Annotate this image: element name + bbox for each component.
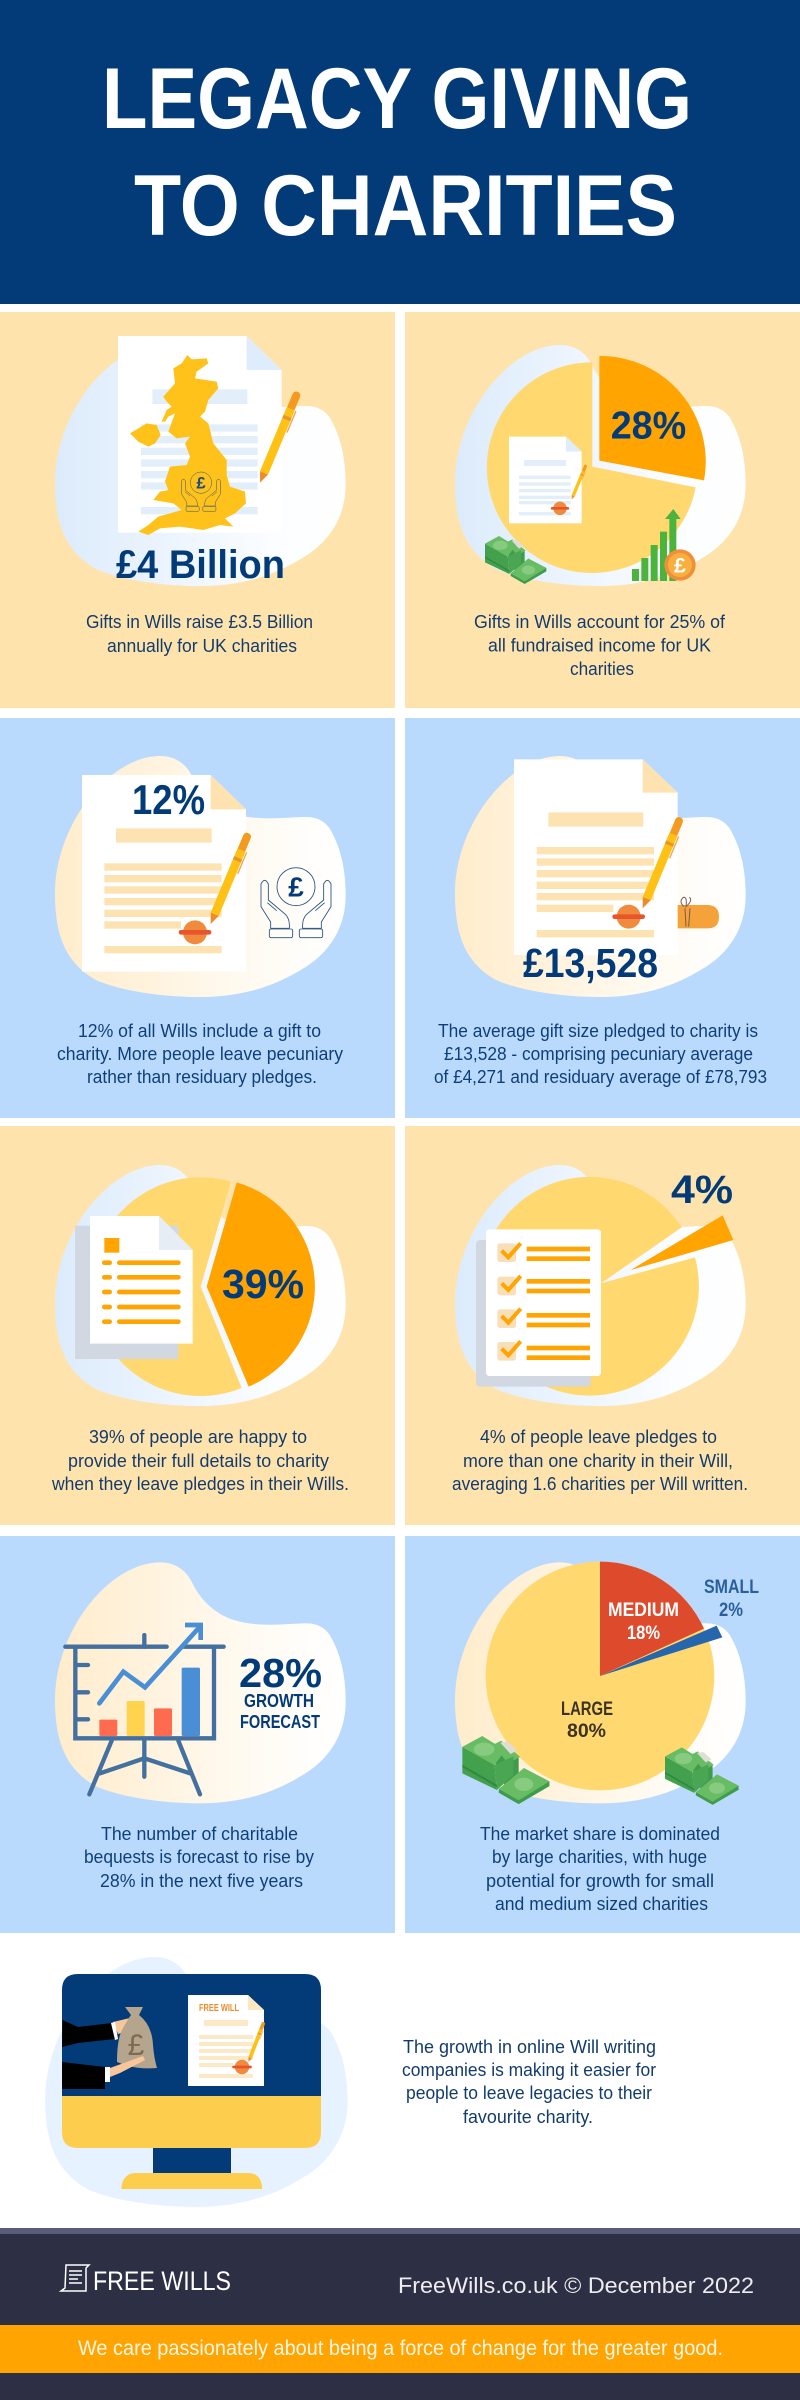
title: LEGACY GIVING xyxy=(102,51,692,147)
pie labels: 80% xyxy=(567,1721,606,1742)
caption 3: 12% of all Wills include a gift to xyxy=(78,1020,321,1041)
illustration: will document and scroll xyxy=(514,759,719,955)
blob 9 xyxy=(45,1957,348,2207)
panel: 28 percent of income xyxy=(405,312,800,708)
panel: growth forecast xyxy=(0,1536,395,1933)
caption 7 xyxy=(84,1823,315,1891)
caption 5: 39% of people are happy to xyxy=(89,1426,307,1447)
text: online will writing xyxy=(402,2036,656,2127)
text: online will writing: people to leave legacies to their xyxy=(406,2082,652,2103)
caption 2 xyxy=(474,611,726,679)
caption 5 xyxy=(51,1426,349,1494)
caption 5: provide their full details to charity xyxy=(68,1450,330,1471)
pie labels: MEDIUM xyxy=(608,1600,679,1621)
panel 7 background xyxy=(0,1536,395,1933)
panel 6 background xyxy=(405,1126,800,1525)
illustration: will document and hands xyxy=(82,775,331,972)
caption 2: charities xyxy=(570,658,634,679)
blob 8 xyxy=(455,1562,746,1803)
caption 3: charity. More people leave pecuniary xyxy=(57,1043,344,1064)
illustration: will with UK map xyxy=(118,336,303,535)
caption 3 xyxy=(57,1020,344,1087)
footer xyxy=(0,2228,800,2400)
caption 4: The average gift size pledged to charity is xyxy=(438,1020,758,1041)
caption 1: Gifts in Wills raise £3.5 Billion xyxy=(86,611,313,632)
pie labels: 2% xyxy=(719,1600,743,1621)
caption 8: potential for growth for small xyxy=(486,1870,714,1891)
caption 2: all fundraised income for UK xyxy=(488,634,712,656)
big number: 39 percent: 39% xyxy=(222,1261,304,1307)
caption 6: 4% of people leave pledges to xyxy=(480,1426,717,1447)
panel: average gift size xyxy=(405,718,800,1118)
big number: 28 percent growth forecast: GROWTH xyxy=(244,1691,314,1711)
caption 4: of £4,271 and residuary average of £78,793 xyxy=(434,1066,767,1087)
caption 8: by large charities, with huge xyxy=(492,1846,707,1867)
panel 5 background xyxy=(0,1126,395,1525)
footer background xyxy=(0,2228,800,2400)
panel 3 background xyxy=(0,718,395,1118)
pie chart 4 percent with checklist xyxy=(476,1177,733,1396)
title: TO CHARITIES xyxy=(134,158,677,254)
will document on screen xyxy=(188,1995,266,2086)
panel 1 background xyxy=(0,312,395,708)
caption 4 xyxy=(434,1020,767,1087)
text: online will writing: favourite charity. xyxy=(463,2106,593,2127)
pie labels: LARGE xyxy=(561,1699,613,1720)
caption 1: annually for UK charities xyxy=(107,635,297,656)
header background xyxy=(0,0,800,304)
caption 7: The number of charitable xyxy=(101,1823,298,1844)
caption 3: rather than residuary pledges. xyxy=(87,1066,317,1087)
pie chart 28 percent xyxy=(485,356,706,584)
big number: 4 percent: 4% xyxy=(671,1168,733,1212)
text: online will writing: The growth in online Will writing xyxy=(403,2036,656,2057)
caption 8: The market share is dominated xyxy=(480,1823,720,1844)
text: online will writing: companies is making it easier for xyxy=(402,2059,656,2080)
big number: 28 percent growth forecast: FORECAST xyxy=(240,1712,320,1732)
panel: 12 percent xyxy=(0,718,395,1118)
caption 6: more than one charity in their Will, xyxy=(463,1450,733,1471)
caption 7: 28% in the next five years xyxy=(100,1870,303,1891)
pie labels xyxy=(561,1577,759,1742)
blob 6 xyxy=(455,1165,746,1406)
big number: 28 percent growth forecast xyxy=(239,1650,322,1732)
caption 4: £13,528 - comprising pecuniary average xyxy=(444,1043,753,1064)
will document on screen: FREE WILL xyxy=(199,2003,239,2014)
caption 8 xyxy=(480,1823,720,1914)
blob 1 xyxy=(55,345,346,586)
title xyxy=(102,51,692,254)
pie chart 28 percent: £ xyxy=(674,554,686,578)
caption 5: when they leave pledges in their Wills. xyxy=(51,1473,349,1494)
banner text: We care passionately about being a force of change for the greater good. xyxy=(78,2337,723,2360)
big number: 13,528: £13,528 xyxy=(523,940,658,986)
big number: 28 percent growth forecast: 28% xyxy=(239,1650,322,1696)
blob 3 xyxy=(55,756,346,997)
caption 8: and medium sized charities xyxy=(495,1893,708,1914)
panel 2 background xyxy=(405,312,800,708)
blob 5 xyxy=(55,1165,346,1406)
panel: 4 percent xyxy=(405,1126,800,1525)
logo: free wills: FREE WILLS xyxy=(93,2266,231,2296)
pie chart 39 percent with document xyxy=(75,1177,315,1396)
caption 6: averaging 1.6 charities per Will written. xyxy=(452,1473,748,1494)
panel: 39 percent xyxy=(0,1126,395,1525)
panel: market share xyxy=(405,1536,800,1933)
website and date: FreeWills.co.uk © December 2022 xyxy=(398,2273,754,2298)
logo: free wills xyxy=(61,2265,231,2296)
caption 7: bequests is forecast to rise by xyxy=(84,1846,315,1867)
blob 7 xyxy=(55,1562,346,1803)
caption 1 xyxy=(86,611,313,656)
caption 2: Gifts in Wills account for 25% of xyxy=(474,611,726,632)
big number: 4 billion: £4 Billion xyxy=(116,543,285,587)
icon: hands holding money bag xyxy=(62,2007,157,2089)
big number: 28 percent: 28% xyxy=(611,404,686,448)
chart: presentation easel xyxy=(65,1625,224,1794)
orange banner xyxy=(0,2325,800,2373)
panel 4 background xyxy=(405,718,800,1118)
pie labels: 18% xyxy=(627,1623,660,1644)
panel: online will writing xyxy=(45,1957,656,2207)
illustration: computer monitor xyxy=(62,1974,321,2189)
pie chart: market share xyxy=(462,1562,739,1805)
big number: 12 percent: 12% xyxy=(132,776,205,823)
caption 6 xyxy=(452,1426,748,1494)
illustration: will with UK map: £ xyxy=(196,474,206,493)
panel: 4 billion xyxy=(0,312,395,708)
icon: hands holding money bag: £ xyxy=(128,2029,145,2062)
illustration: will document and hands: £ xyxy=(288,872,304,903)
blob 2 xyxy=(455,345,746,586)
blob 4 xyxy=(455,756,746,997)
panel 8 background xyxy=(405,1536,800,1933)
pie labels: SMALL xyxy=(704,1577,759,1598)
